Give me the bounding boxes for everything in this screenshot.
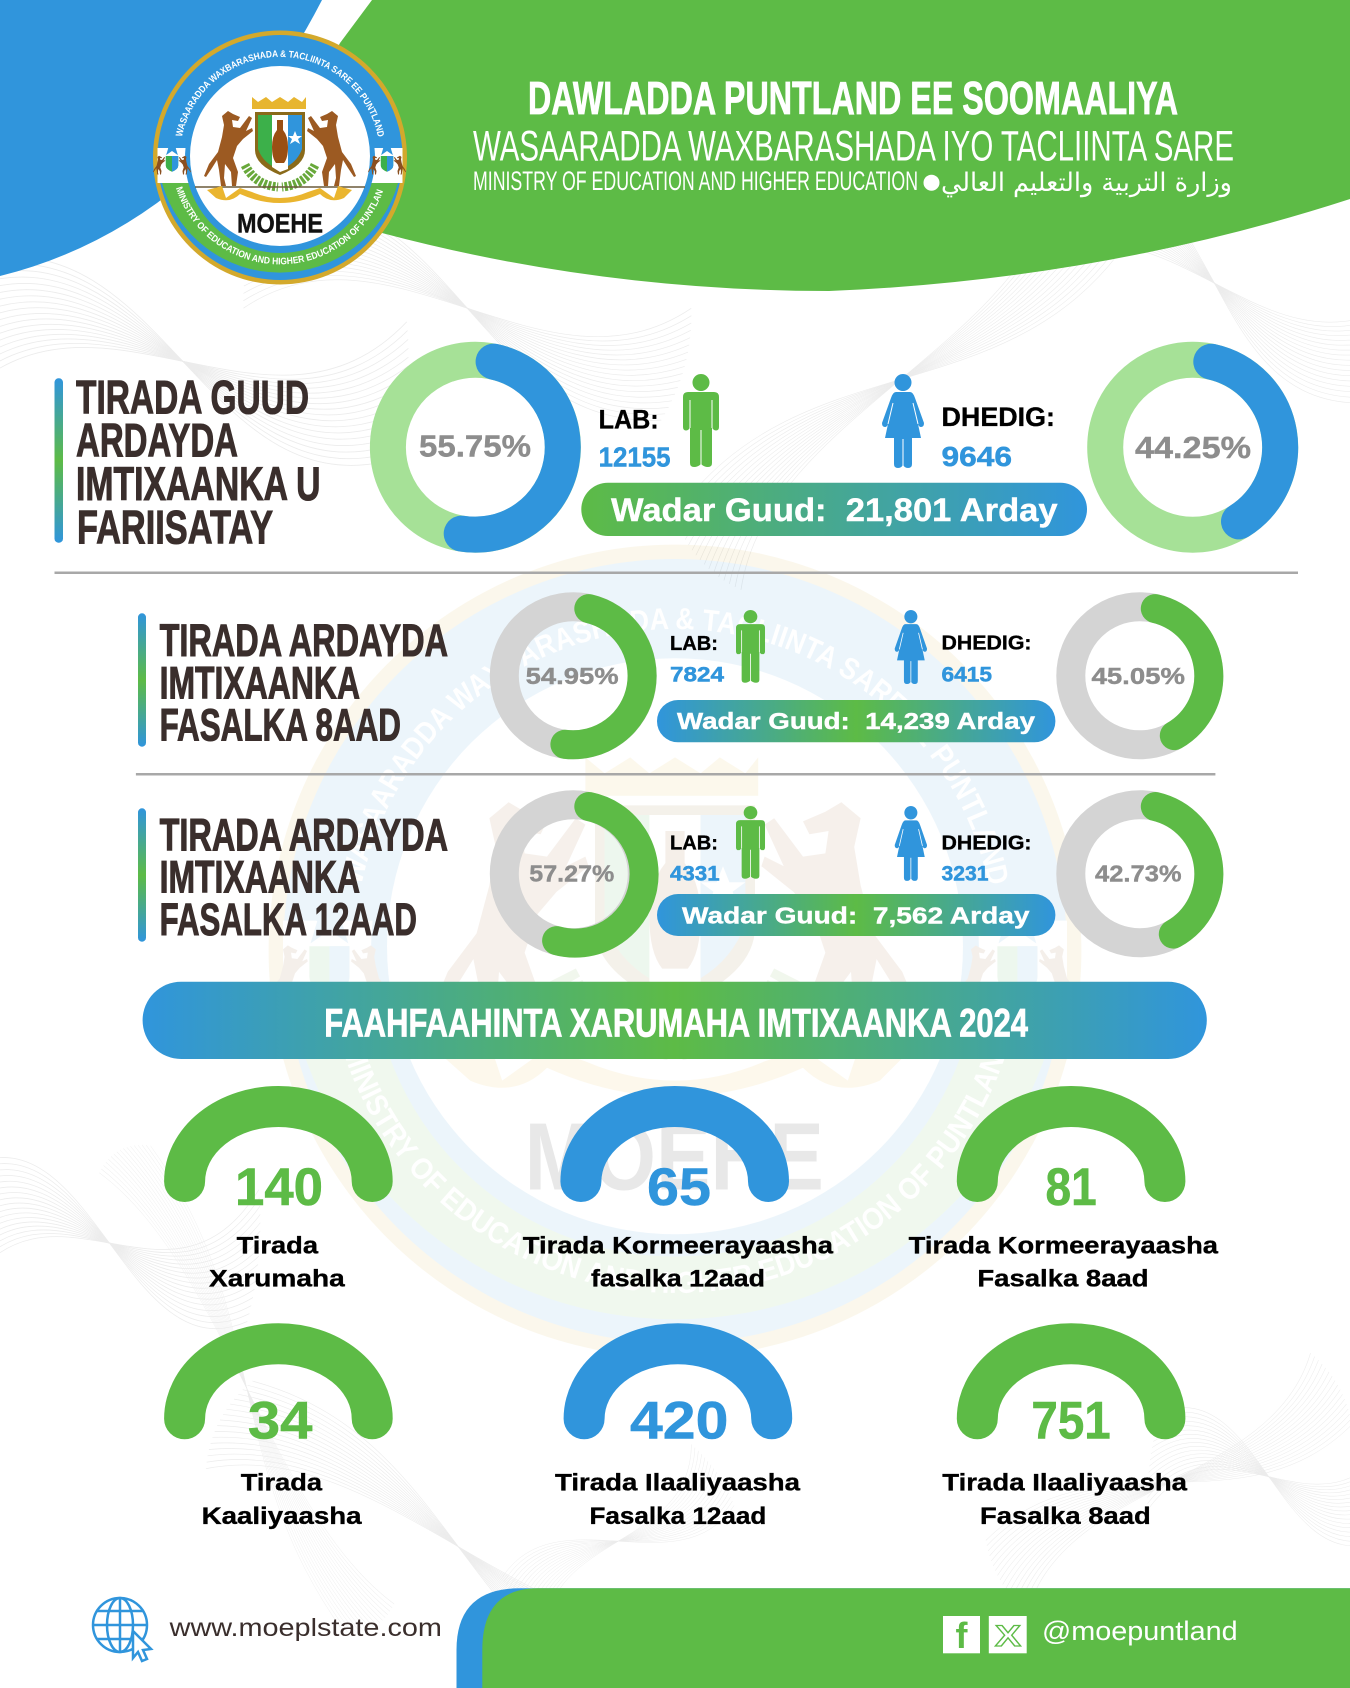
icon: globe with cursor: [93, 1598, 151, 1661]
logo: ministry seal: WASAARADDA WAXBARASHADA & TACLIINTA SARE EE PUNTLAND: [176, 50, 384, 136]
male count: [670, 832, 720, 886]
male count: LAB:: [670, 633, 718, 655]
footer: green panel: [482, 1588, 1350, 1688]
stat: grade 12 supervisors: 65: [647, 1158, 711, 1217]
heading: grade 12 students: FASALKA 12AAD: [160, 894, 417, 945]
stat: grade 8 supervisors: Fasalka 8aad: [977, 1266, 1149, 1293]
donut chart: male 57.27%: 57.27%: [529, 861, 614, 887]
female count: [942, 832, 1032, 886]
icon: facebook: [943, 1615, 980, 1656]
stat: grade 12 invigilators: [555, 1344, 801, 1530]
heading: grade 12 students: TIRADA ARDAYDA: [160, 810, 448, 861]
female count: DHEDIG:: [942, 632, 1032, 654]
icon: female figure: [895, 610, 927, 684]
heading: grade 8 students: FASALKA 8AAD: [160, 700, 401, 751]
female count: 9646: [942, 441, 1012, 472]
heading: grade 12 students: [138, 808, 448, 945]
donut chart: male 54.95%: [504, 607, 642, 745]
stat: exam centres: [185, 1106, 372, 1293]
stat: grade 8 invigilators: [942, 1344, 1188, 1530]
male count: LAB:: [670, 832, 718, 854]
total pill: Wadar Guud: 14,239 Arday: [677, 708, 1035, 734]
male count: LAB:: [599, 404, 659, 434]
header titles: MINISTRY OF EDUCATION AND HIGHER EDUCATION: [473, 166, 918, 196]
donut chart: male 55.75%: 55.75%: [419, 429, 531, 464]
header titles: وزارة التربية والتعليم العالي: [941, 168, 1232, 198]
total pill: Wadar Guud: 7,562 Arday: [682, 902, 1030, 928]
donut chart: male 54.95%: 54.95%: [526, 663, 619, 689]
stat: grade 12 supervisors: Tirada Kormeerayaasha: [523, 1232, 834, 1259]
header: green banner shape: [300, 0, 1350, 291]
heading: grade 8 students: [138, 613, 448, 751]
stat: grade 12 supervisors: fasalka 12aad: [591, 1266, 765, 1293]
watermark: faded ministry seal: [268, 544, 1082, 1350]
icon: facebook: f: [956, 1615, 968, 1656]
male count: 12155: [599, 442, 671, 473]
heading: grade 8 students: IMTIXAANKA: [160, 658, 360, 709]
stat: grade 8 supervisors: [909, 1106, 1219, 1293]
donut chart: female 45.05%: [1071, 607, 1209, 745]
watermark: faded ministry seal: MOEHE: [525, 1103, 824, 1210]
stat: exam centres: Xarumaha: [209, 1266, 345, 1293]
donut chart: female 45.05%: 45.05%: [1092, 663, 1185, 689]
stat: grade 12 invigilators: Fasalka 12aad: [590, 1503, 766, 1530]
donut chart: female 42.73%: [1071, 805, 1209, 943]
social handle: @moepuntland: [1042, 1616, 1238, 1646]
heading: total students: ARDAYDA: [76, 414, 238, 467]
stat: exam centres: Tirada: [237, 1232, 319, 1259]
stat: grade 8 invigilators: Fasalka 8aad: [980, 1503, 1151, 1530]
heading: grade 12 students: IMTIXAANKA: [160, 852, 360, 903]
total pill: [657, 894, 1055, 936]
stat: grade 8 supervisors: 81: [1046, 1158, 1097, 1217]
donut chart: female 42.73%: 42.73%: [1095, 861, 1182, 887]
male count: 4331: [670, 863, 720, 886]
heading: grade 8 students: TIRADA ARDAYDA: [160, 615, 448, 666]
stat: assistants: Kaaliyaasha: [202, 1503, 362, 1530]
heading: total students: IMTIXAANKA U: [76, 457, 320, 510]
stat: grade 12 invigilators: Tirada Ilaaliyaasha: [555, 1470, 801, 1497]
header: blue corner shape: [0, 0, 322, 276]
website address: www.moeplstate.com: [169, 1614, 442, 1642]
donut chart: male 57.27%: [504, 805, 644, 943]
male count: [670, 633, 724, 687]
stat: assistants: [185, 1344, 372, 1530]
heading: total students: FARIISATAY: [77, 500, 273, 553]
footer: blue back shape: [456, 1588, 1350, 1688]
section banner: [143, 982, 1207, 1059]
stat: grade 8 supervisors: Tirada Kormeerayaasha: [909, 1232, 1219, 1259]
icon: male figure: [683, 374, 719, 467]
panel: total students: [54, 360, 1280, 553]
logo: ministry seal: MOEHE: [237, 209, 323, 239]
icon: male figure: [736, 610, 765, 683]
heading: total students: [54, 370, 320, 553]
female count: 6415: [942, 664, 992, 687]
male count: 7824: [670, 664, 724, 687]
female count: [942, 402, 1055, 472]
total pill: Wadar Guud: 21,801 Arday: [611, 492, 1058, 528]
donut chart: female 44.25%: 44.25%: [1135, 430, 1251, 465]
female count: DHEDIG:: [942, 402, 1055, 432]
header titles: [473, 72, 1234, 198]
stat: grade 12 invigilators: 420: [630, 1391, 728, 1450]
panel: grade 12: [138, 805, 1209, 945]
panel: grade 8: [138, 607, 1209, 751]
stat: grade 8 invigilators: 751: [1031, 1391, 1111, 1450]
stat: assistants: Tirada: [241, 1470, 323, 1497]
icon: x: [989, 1616, 1027, 1653]
section banner: FAAHFAAHINTA XARUMAHA IMTIXAANKA 2024: [324, 1002, 1029, 1046]
total pill: [581, 483, 1087, 536]
icon: x: X: [995, 1620, 1021, 1653]
male count: [599, 404, 671, 473]
icon: male figure: [736, 806, 765, 879]
logo: ministry seal: [153, 30, 407, 284]
stat: grade 12 supervisors: [523, 1107, 834, 1293]
stat: grade 8 invigilators: Tirada Ilaaliyaasha: [942, 1470, 1188, 1497]
heading: total students: TIRADA GUUD: [76, 370, 309, 423]
donut chart: female 44.25%: [1105, 360, 1280, 535]
female count: [942, 632, 1032, 687]
icon: female figure: [895, 806, 927, 881]
watermark: faded ministry seal: WASAARADDA WAXBARASHADA & TACLIINTA SARE EE PUNTLAND: [346, 608, 1008, 884]
icon: female figure: [882, 374, 924, 468]
total pill: [657, 700, 1055, 742]
female count: 3231: [942, 863, 989, 886]
stat: assistants: 34: [248, 1391, 313, 1450]
stat: exam centres: 140: [235, 1158, 323, 1217]
female count: DHEDIG:: [942, 832, 1032, 854]
donut chart: male 55.75%: [388, 360, 563, 535]
